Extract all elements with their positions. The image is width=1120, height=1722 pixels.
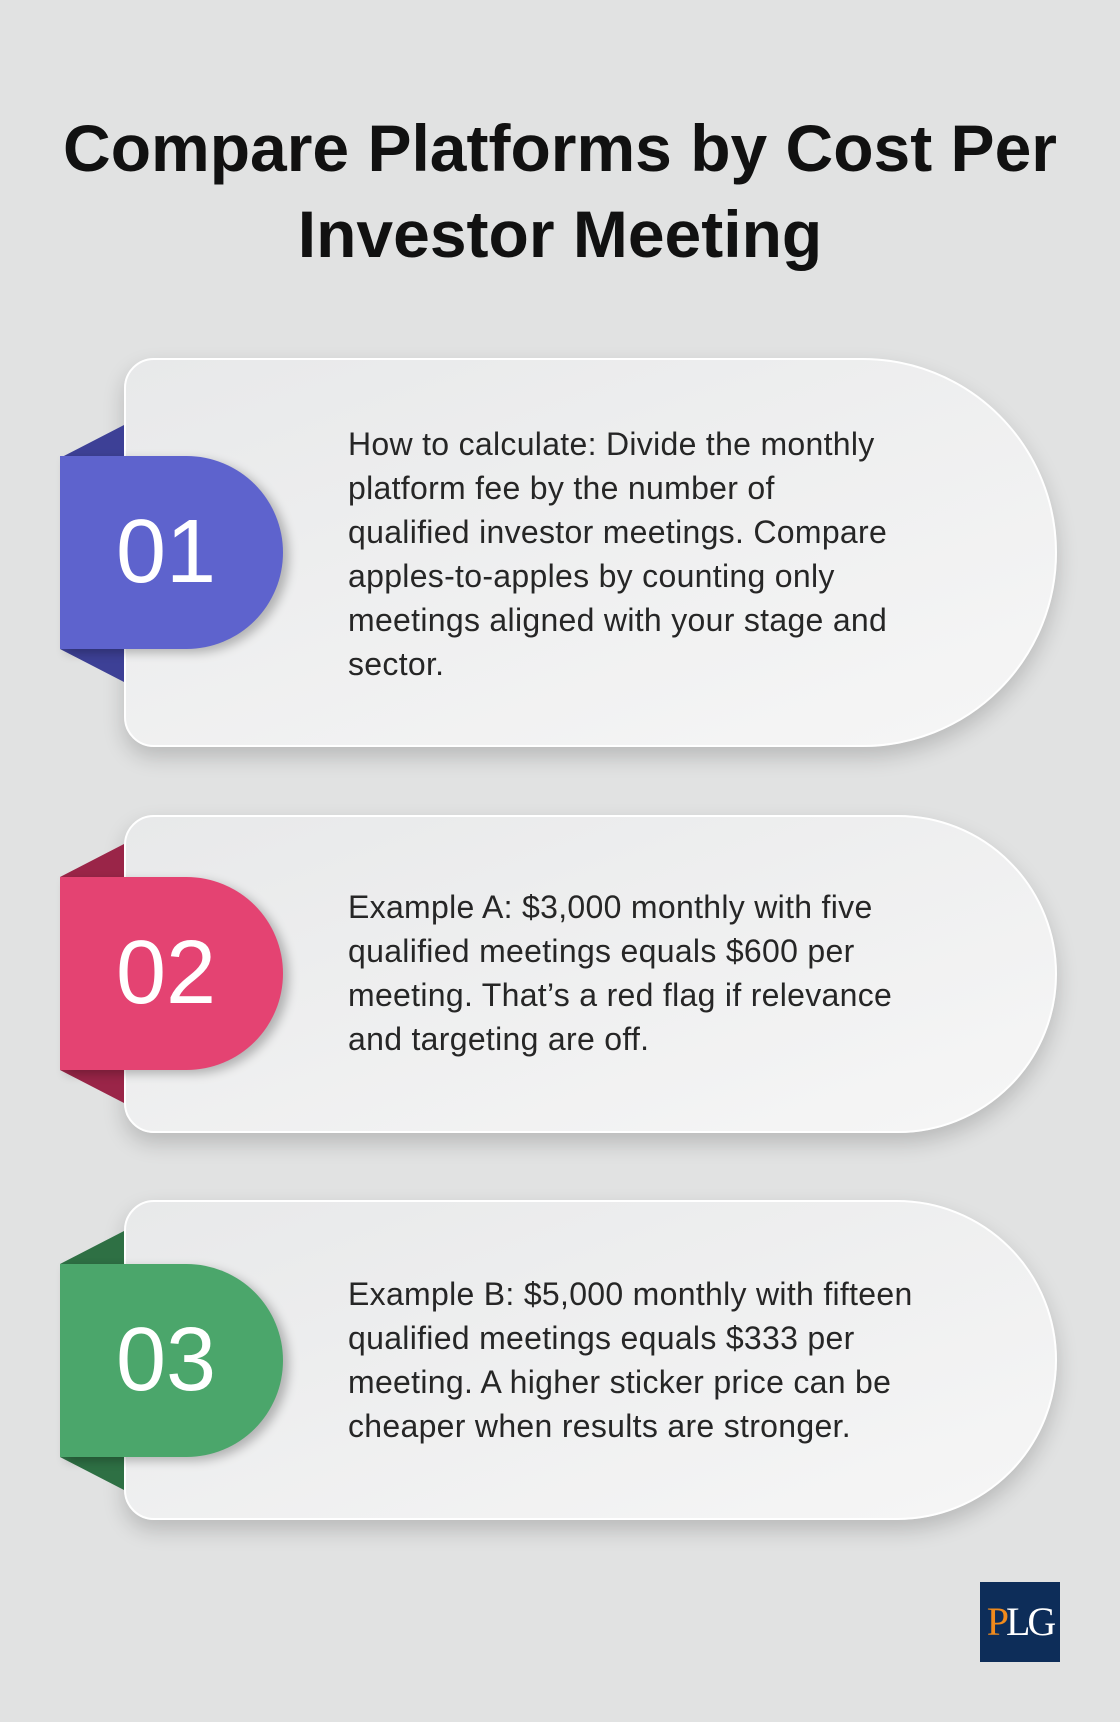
badge 02: 02: [116, 923, 216, 1023]
text 01: platform fee by the number of: [348, 470, 775, 506]
title: Compare Platforms by Cost Per: [63, 111, 1057, 185]
text 02: meeting. That’s a red flag if relevance: [348, 977, 892, 1013]
text 01: meetings aligned with your stage and: [348, 602, 887, 638]
card 02: [124, 815, 1057, 1133]
badge 03: [60, 1264, 283, 1457]
badge 01: [60, 456, 283, 649]
text 02: Example A: $3,000 monthly with five: [348, 889, 873, 925]
logo: PLG: [987, 1599, 1053, 1644]
text 03: Example B: $5,000 monthly with fifteen: [348, 1276, 913, 1312]
text 03: [348, 1276, 913, 1444]
ribbon fold 03: [60, 1231, 124, 1264]
card 03: [124, 1200, 1057, 1520]
title: Investor Meeting: [298, 197, 822, 271]
text 02: and targeting are off.: [348, 1021, 649, 1057]
panel: step 01: [60, 358, 1065, 766]
text 03: cheaper when results are stronger.: [348, 1408, 851, 1444]
badge 03: 03: [116, 1310, 216, 1410]
ribbon fold 01: [64, 425, 124, 456]
text 01: How to calculate: Divide the monthly: [348, 426, 875, 462]
text 01: sector.: [348, 646, 444, 682]
card 01: [124, 358, 1057, 747]
badge 01: 01: [116, 502, 216, 602]
text 01: apples-to-apples by counting only: [348, 558, 835, 594]
text 01: [348, 426, 887, 682]
title: [63, 111, 1057, 271]
text 03: meeting. A higher sticker price can be: [348, 1364, 891, 1400]
panel: step 03: [60, 1200, 1065, 1538]
text 02: qualified meetings equals $600 per: [348, 933, 855, 969]
text 03: qualified meetings equals $333 per: [348, 1320, 855, 1356]
badge 02: [60, 877, 283, 1070]
panel: step 02: [60, 815, 1065, 1152]
logo: [980, 1582, 1060, 1662]
text 01: qualified investor meetings. Compare: [348, 514, 887, 550]
text 02: [348, 889, 892, 1057]
ribbon fold 02: [60, 844, 124, 877]
